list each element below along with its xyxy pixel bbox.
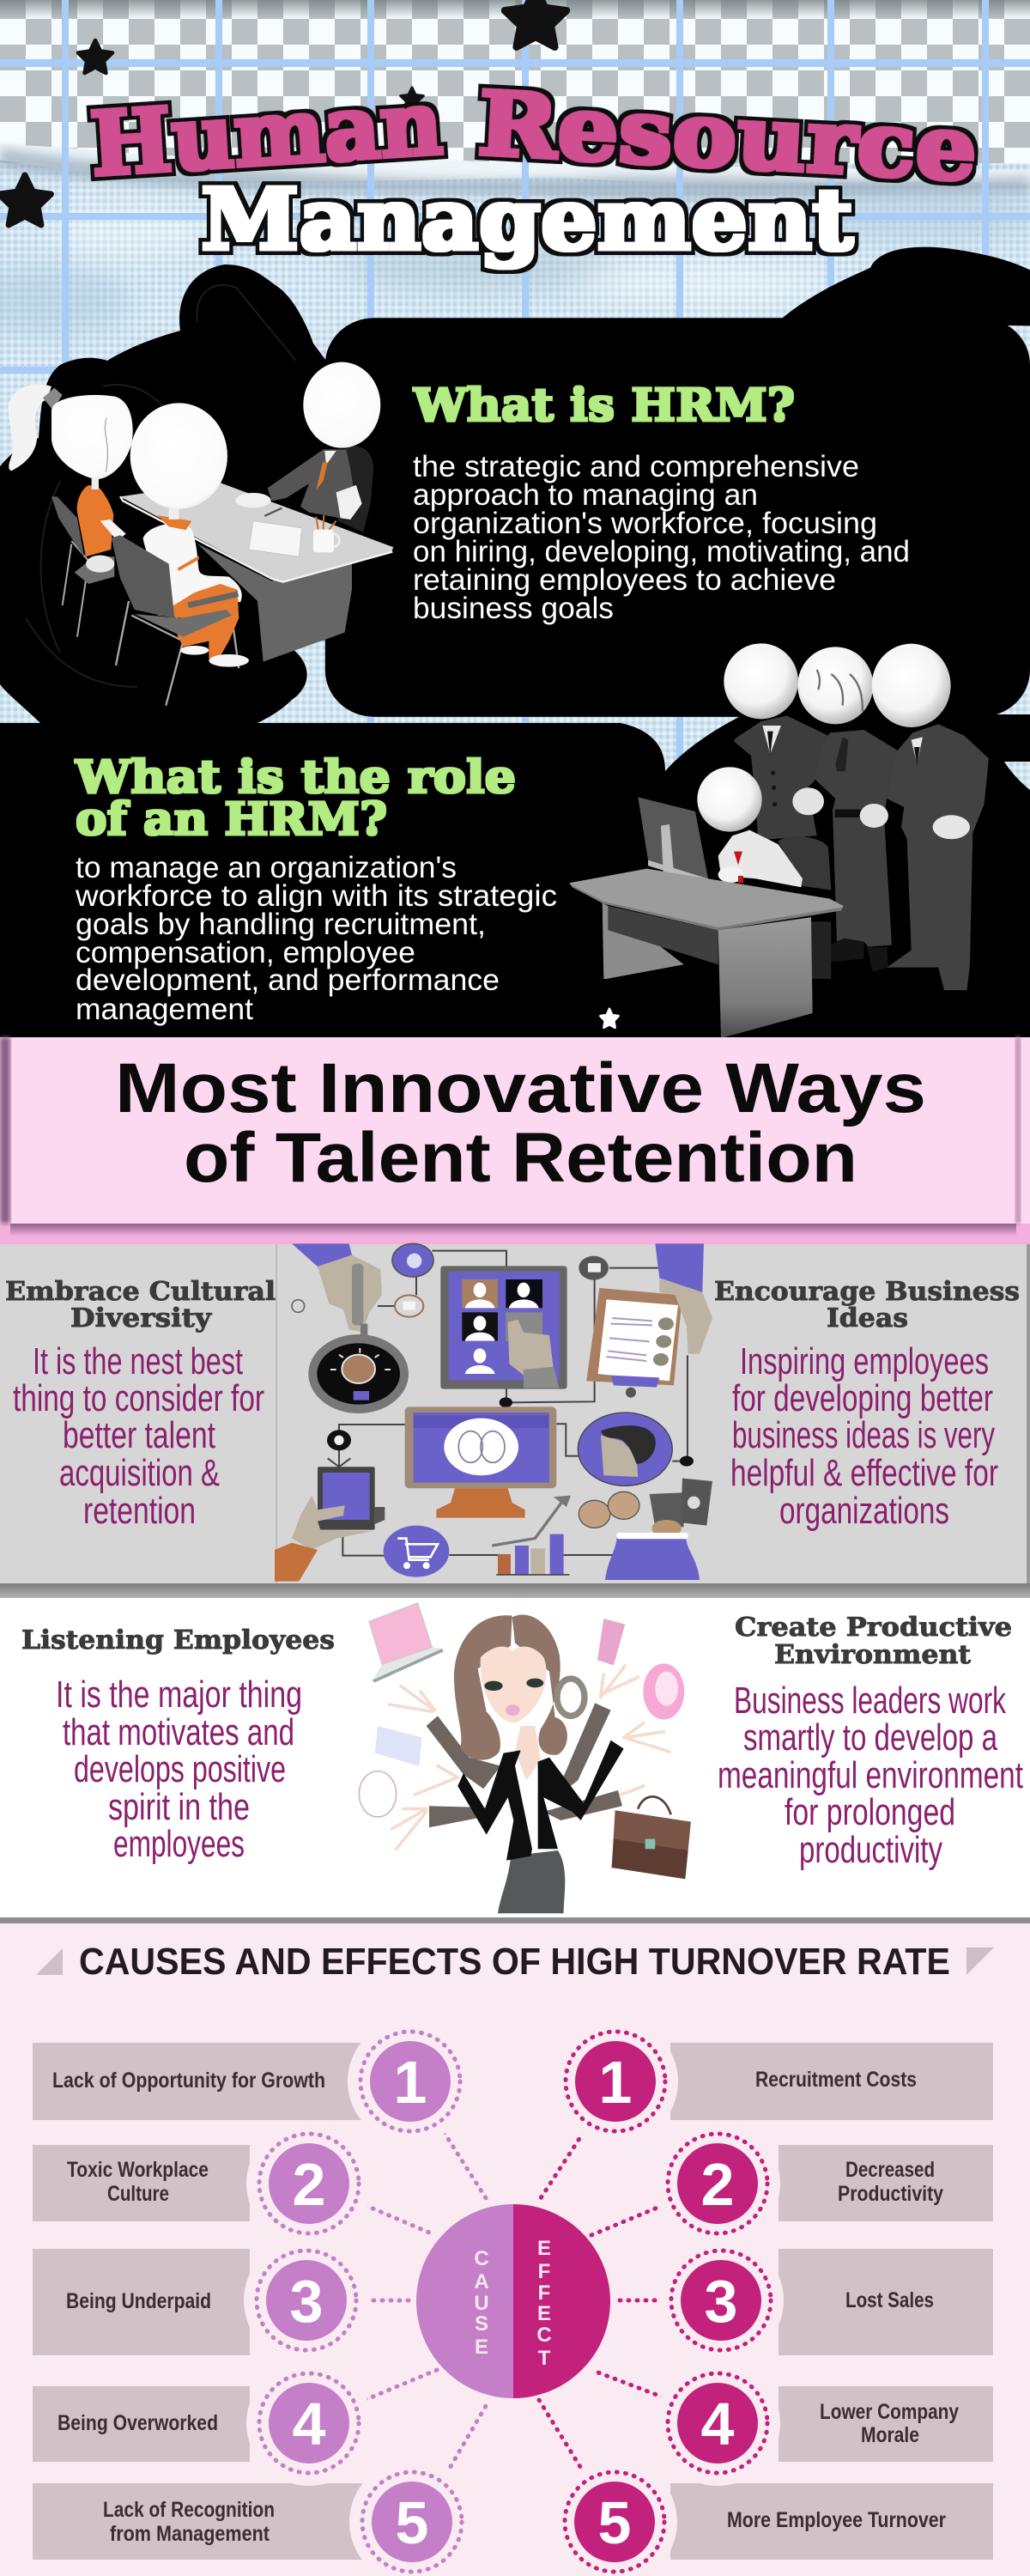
numbered causes [244, 2019, 475, 2576]
portrait circle [578, 1413, 694, 1485]
central cause and effect circle: E [537, 2237, 551, 2260]
office desk [569, 869, 844, 1038]
text: what is HRM [413, 380, 910, 625]
cause labels: Being Underpaid [66, 2289, 211, 2313]
effect labels: Morale [861, 2423, 919, 2447]
panel: causes and effects of high turnover [0, 1917, 1030, 2576]
left manager [734, 715, 831, 840]
paragraph: role description [75, 851, 557, 1026]
icon: chat bubbles [579, 1256, 609, 1280]
text: embrace cultural diversity: Embrace Cultural [5, 1277, 276, 1307]
grey sleeves [427, 1703, 622, 1827]
paragraph: role description: development, and performance [76, 963, 500, 997]
monitor [638, 797, 749, 896]
icon: white star [601, 1009, 618, 1028]
illustration: managers watching a seated worker [569, 643, 989, 1038]
growth bars and arrow [492, 1496, 571, 1575]
numbered causes: 3 [290, 2268, 323, 2335]
icon: gear [327, 1430, 351, 1450]
panel: diversity and business ideas [0, 1244, 1030, 1599]
numbered effects [552, 2019, 784, 2576]
central cause and effect circle: U [474, 2292, 489, 2315]
hands [389, 1666, 670, 1849]
smartphone in hand [275, 1467, 385, 1582]
heading: talent retention: Most Innovative Ways [115, 1049, 926, 1127]
panel: talent retention banner [0, 1037, 1030, 1245]
cause labels: Lack of Opportunity for Growth [52, 2069, 325, 2093]
effect labels: Decreased [845, 2158, 935, 2182]
central cause and effect circle: E [475, 2336, 488, 2359]
blouse and jacket [457, 1726, 624, 1861]
text: embrace cultural diversity: retention [83, 1490, 196, 1532]
text: encourage business ideas [714, 1277, 1020, 1532]
heading: talent retention [115, 1049, 926, 1197]
title: Management [201, 171, 853, 270]
central cause and effect circle: A [474, 2270, 489, 2293]
cause and effect label bars [33, 2043, 993, 2560]
effect labels: Recruitment Costs [755, 2068, 917, 2092]
effect labels: More Employee Turnover [727, 2508, 946, 2532]
numbered effects: 3 [705, 2268, 737, 2335]
heading: talent retention: of Talent Retention [184, 1119, 857, 1197]
text: role of an HRM [75, 751, 557, 1026]
paragraph: role description: to manage an organization's [76, 851, 457, 884]
heading: what is HRM: What is HRM? [413, 380, 795, 432]
text: create productive environment [718, 1613, 1023, 1871]
seated worker [697, 767, 831, 979]
paragraph: definition: approach to managing an [413, 478, 758, 512]
numbered effects: 5 [598, 2489, 631, 2556]
title [88, 71, 979, 270]
icon: power [292, 1300, 305, 1312]
right manager [887, 724, 989, 990]
text: encourage business ideas: organizations [779, 1490, 949, 1532]
paragraph: role description: management [76, 993, 253, 1026]
woman manager [814, 730, 897, 972]
text: listening employees: develops positive [74, 1748, 286, 1790]
tablet with employee portraits [440, 1266, 567, 1389]
hair and face [454, 1614, 585, 1760]
cause labels: Being Overworked [58, 2411, 218, 2435]
heading: causes and effects: CAUSES AND EFFECTS OF HIGH TURNOVER RATE [79, 1941, 950, 1983]
numbered effects: 2 [701, 2151, 734, 2218]
text: listening employees [21, 1625, 335, 1865]
paragraph: role description: goals by handling recruitment, [76, 908, 486, 941]
black panel: role of an HRM backdrop [0, 714, 1030, 1037]
cause labels: Toxic Workplace [67, 2158, 209, 2182]
monitor with brain [405, 1397, 556, 1518]
icon: globe [392, 1243, 433, 1277]
central cause and effect circle: E [537, 2302, 551, 2325]
connector lines [328, 1251, 688, 1556]
text: listening employees: employees [113, 1823, 245, 1865]
paragraph: role description: workforce to align with its strategic [75, 879, 557, 913]
central cause and effect circle [416, 2204, 610, 2398]
star decorations [0, 0, 566, 225]
clipboard with checklist [586, 1243, 712, 1398]
hand with lightbulb lens [292, 1243, 409, 1413]
effect labels: Productivity [838, 2182, 943, 2206]
second figure: chair and seated person [112, 403, 249, 706]
paragraph: definition: organization's workforce, focusing [413, 507, 877, 540]
coins and banknotes [579, 1479, 712, 1528]
cause labels: Lack of Recognition [103, 2498, 275, 2522]
skirt [498, 1850, 565, 1913]
desk [120, 483, 393, 662]
text: encourage business ideas: Encourage Business [714, 1277, 1020, 1307]
numbered causes: 4 [293, 2391, 326, 2458]
central cause and effect circle: C [474, 2247, 489, 2270]
title: Human [88, 71, 445, 197]
numbered effects: 4 [701, 2391, 735, 2458]
first figure: woman with ponytail [9, 384, 133, 637]
text: embrace cultural diversity: better talent [63, 1414, 215, 1456]
effect labels: Lost Sales [845, 2288, 934, 2312]
text: embrace cultural diversity: thing to consider for [13, 1377, 264, 1419]
manager heads [724, 643, 951, 727]
illustration: multitasking businesswoman [359, 1603, 691, 1913]
purple purse [605, 1520, 700, 1580]
numbered causes: 1 [394, 2049, 427, 2116]
floating office objects [359, 1603, 684, 1817]
cause labels: from Management [110, 2522, 270, 2546]
text: create productive environment: Create Productive [735, 1613, 1012, 1643]
text: encourage business ideas: Ideas [827, 1303, 908, 1334]
paragraph: role description: compensation, employee [76, 936, 415, 969]
central cause and effect circle: F [538, 2281, 550, 2305]
text: listening employees: spirit in the [108, 1786, 250, 1828]
numbered effects: 1 [599, 2049, 632, 2116]
central cause and effect circle: C [536, 2324, 552, 2347]
illustration: technology and business network [275, 1243, 712, 1582]
text: create productive environment: Environment [774, 1640, 971, 1670]
paragraph: definition: business goals [413, 592, 614, 625]
text: listening employees: Listening Employees [21, 1625, 335, 1656]
central cause and effect circle: F [538, 2260, 550, 2283]
central cause and effect circle: T [538, 2347, 551, 2370]
paragraph: definition: retaining employees to achieve [413, 563, 836, 597]
connector lines: causes [365, 2132, 489, 2474]
connector lines: effects [537, 2132, 663, 2474]
panel: hero background [0, 0, 1030, 1037]
cause labels [52, 2069, 325, 2546]
text: embrace cultural diversity: Diversity [70, 1303, 213, 1334]
interviewer in dark suit [235, 362, 380, 552]
numbered causes: 5 [396, 2489, 428, 2556]
title: Resource [476, 72, 979, 201]
heading: role of an HRM [75, 751, 516, 846]
icon: shopping cart [384, 1526, 449, 1577]
panel: listening and productive environment [0, 1598, 1030, 1923]
central cause and effect circle: S [475, 2312, 488, 2336]
black panel: what is HRM backdrop [0, 247, 1030, 726]
text: create productive environment: for prolonged [785, 1791, 955, 1833]
effect labels [727, 2068, 959, 2532]
cause labels: Culture [107, 2182, 169, 2206]
text: listening employees: It is the major thing [56, 1674, 302, 1716]
text: embrace cultural diversity: acquisition & [59, 1452, 220, 1494]
text: embrace cultural diversity [5, 1277, 276, 1532]
heading: role of an HRM: of an HRM? [76, 793, 387, 846]
paragraph: definition: the strategic and comprehensive [413, 450, 859, 483]
text: listening employees: that motivates and [63, 1711, 294, 1753]
heading: role of an HRM: What is the role [75, 751, 516, 804]
paragraph: definition: on hiring, developing, motivating, and [413, 535, 910, 568]
text: create productive environment: productivity [799, 1829, 942, 1871]
text: embrace cultural diversity: It is the nest best [33, 1340, 243, 1382]
icon: briefcase [395, 1295, 423, 1317]
numbered causes: 2 [293, 2151, 325, 2218]
effect labels: Lower Company [820, 2400, 959, 2424]
briefcase [612, 1796, 691, 1879]
illustration: job interview figures [9, 362, 393, 706]
paragraph: definition [413, 450, 910, 625]
icon: heading triangles [36, 1947, 994, 1975]
